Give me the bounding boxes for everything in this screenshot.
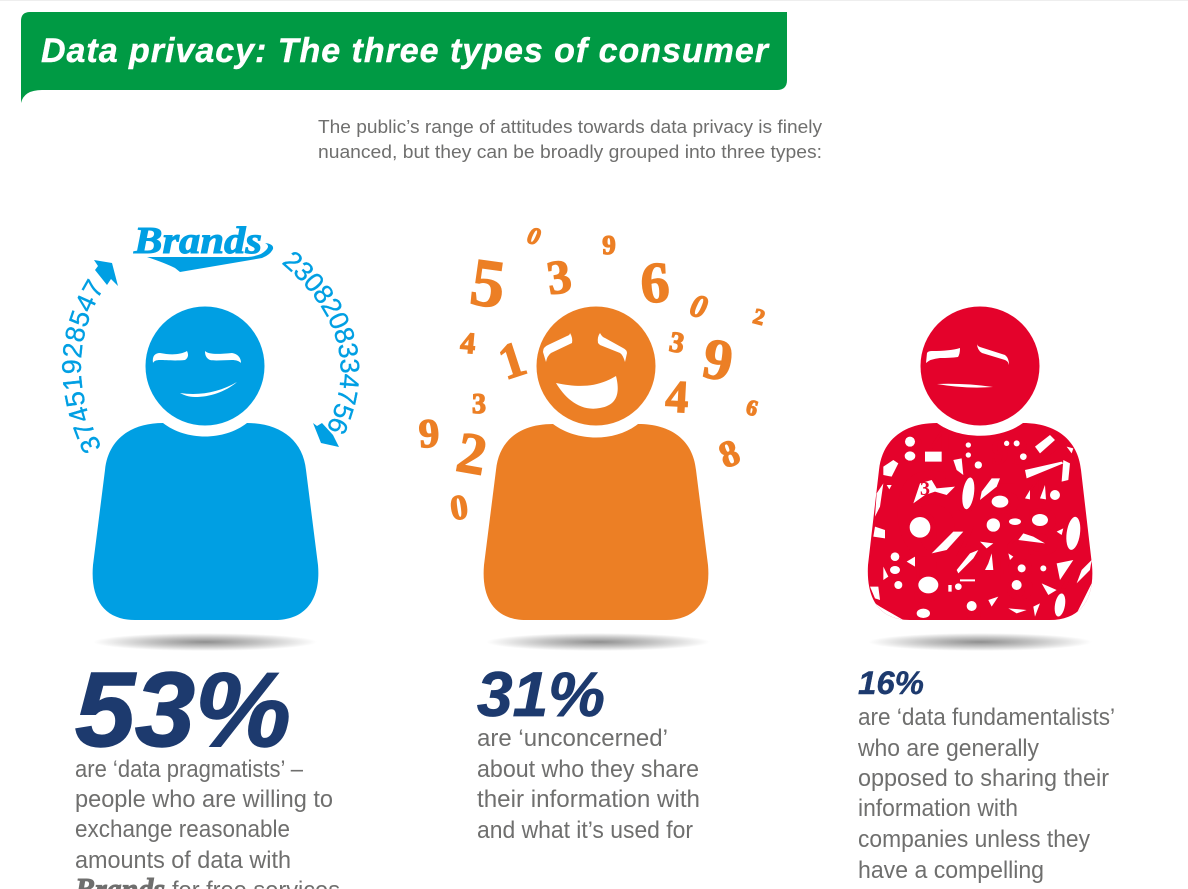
head [146, 306, 264, 426]
body made of numbers: 7 [952, 515, 974, 566]
floating numbers: 3 [543, 250, 575, 305]
stat: 31%: and what it’s used for [477, 817, 693, 844]
figure: data pragmatist (blue) [62, 220, 360, 620]
body made of numbers: 5 [912, 549, 942, 615]
floating numbers: 8 [714, 432, 745, 477]
body [93, 423, 318, 620]
body made of numbers: 5 [994, 465, 1020, 525]
stat: 16%: 16% [858, 665, 924, 701]
stat: 53%: 53% [75, 651, 291, 769]
floating numbers: 6 [744, 394, 761, 421]
body made of numbers: 5 [964, 590, 982, 630]
floating numbers: 9 [698, 325, 738, 394]
body made of numbers: 4 [928, 415, 952, 471]
stat: 16%: opposed to sharing their [858, 765, 1109, 792]
floating numbers: 2 [452, 419, 492, 488]
stat: 16%: who are generally [857, 735, 1039, 762]
body made of numbers: 8 [894, 424, 929, 473]
floating numbers: 3 [472, 389, 486, 420]
floating numbers [418, 223, 768, 528]
body made of numbers: 3 [1011, 432, 1029, 472]
stat: 31%: 31% [477, 660, 605, 730]
floating numbers: 2 [751, 303, 768, 330]
body made of numbers: 2 [1006, 508, 1028, 559]
figure: unconcerned (orange) [418, 223, 768, 620]
stat: 16%: are ‘data fundamentalists’ [858, 704, 1115, 731]
body made of numbers [868, 423, 1092, 620]
stat: 53%: amounts of data with [75, 847, 291, 874]
body made of numbers: 7 [1056, 553, 1078, 599]
title banner: Data privacy: The three types of consumer [41, 32, 770, 70]
stat: 31% [477, 660, 700, 844]
stat: 16% [857, 665, 1115, 884]
head [920, 306, 1040, 426]
stat: 53%: are ‘data pragmatists’ – [75, 756, 304, 783]
shadow orange [486, 633, 710, 651]
body made of numbers: 3 [920, 478, 930, 500]
floating numbers: 6 [639, 249, 671, 316]
stat: 53%: exchange reasonable [75, 816, 290, 843]
arc of numbers left: 37451928547 [62, 278, 101, 453]
body made of numbers: 9 [991, 432, 1009, 472]
stat: 16%: information with [858, 795, 1018, 822]
intro text: nuanced, but they can be broadly grouped into three types: [318, 141, 822, 162]
intro text: The public’s range of attitudes towards data privacy is finely [318, 116, 823, 137]
floating numbers: 4 [664, 370, 690, 423]
figure: fundamentalist (red) [860, 306, 1100, 630]
gaps between upper digits [875, 435, 1074, 526]
stat: 31%: their information with [477, 786, 700, 813]
stat: 53% [74, 651, 340, 889]
floating numbers: 0 [448, 487, 470, 528]
floating numbers: 3 [667, 326, 687, 360]
brands logo: Brands [133, 220, 262, 262]
stat: 31%: about who they share [477, 756, 699, 783]
arrow down [313, 423, 339, 447]
floating numbers: 9 [602, 230, 616, 260]
head [536, 306, 656, 426]
gaps between lower digits [860, 516, 1100, 620]
body made of numbers: 4 [1027, 465, 1047, 510]
body made of numbers: 8 [1005, 546, 1035, 612]
arrow up [94, 260, 118, 286]
stat: 16%: companies unless they [858, 826, 1090, 853]
body made of numbers: 4 [982, 539, 1004, 590]
stat: 31%: are ‘unconcerned’ [477, 725, 668, 752]
intro text [318, 116, 823, 162]
title banner [21, 12, 787, 103]
body made of numbers: 2 [1038, 420, 1062, 476]
floating numbers: 5 [466, 243, 510, 323]
floating numbers: 0 [525, 223, 543, 251]
body [484, 424, 708, 620]
floating numbers: 9 [418, 409, 440, 457]
body made of numbers: 0 [955, 467, 981, 524]
body made of numbers: 6 [887, 439, 963, 587]
floating numbers: 4 [459, 326, 477, 361]
stat: 16%: have a compelling [858, 857, 1044, 884]
stat: 53%: people who are willing to [75, 786, 333, 813]
brands logo [133, 220, 273, 272]
shadow red [868, 633, 1092, 651]
shadow blue [93, 633, 317, 651]
floating numbers: 0 [687, 287, 711, 325]
floating numbers: 1 [491, 330, 533, 390]
body made of numbers: 2 [958, 536, 982, 587]
arc of numbers right: 2308208334756 [282, 252, 360, 434]
body made of numbers: 3 [1026, 494, 1060, 571]
